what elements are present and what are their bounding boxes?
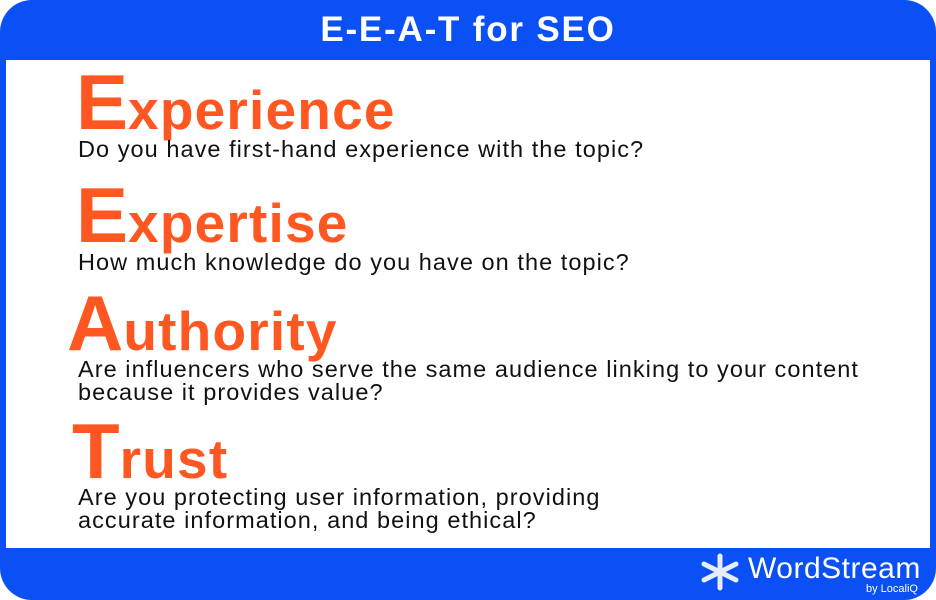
logo subtext: by LocaliQ [866,583,918,595]
icon: wordstream mark [702,554,738,590]
heading: Expertise: Expertise [76,171,349,259]
heading: Trust: Trust [72,407,228,495]
text: trust: Are you protecting user information, providing [78,484,600,510]
text: experience: Do you have first-hand experience with the topic? [78,136,644,162]
text: authority: because it provides value? [78,379,384,405]
heading: Experience: Experience [76,58,396,146]
text: trust [78,484,600,533]
heading: Authority: Authority [67,279,338,367]
text: expertise: How much knowledge do you have on the topic? [78,249,630,275]
text: authority: Are influencers who serve the same audience linking to your content [78,356,859,382]
text: trust: accurate information, and being ethical? [78,507,537,533]
text: authority [78,356,859,405]
title: E-E-A-T for SEO [320,10,616,49]
logo: WordStream [702,552,921,595]
logo text: WordStream [748,552,921,585]
